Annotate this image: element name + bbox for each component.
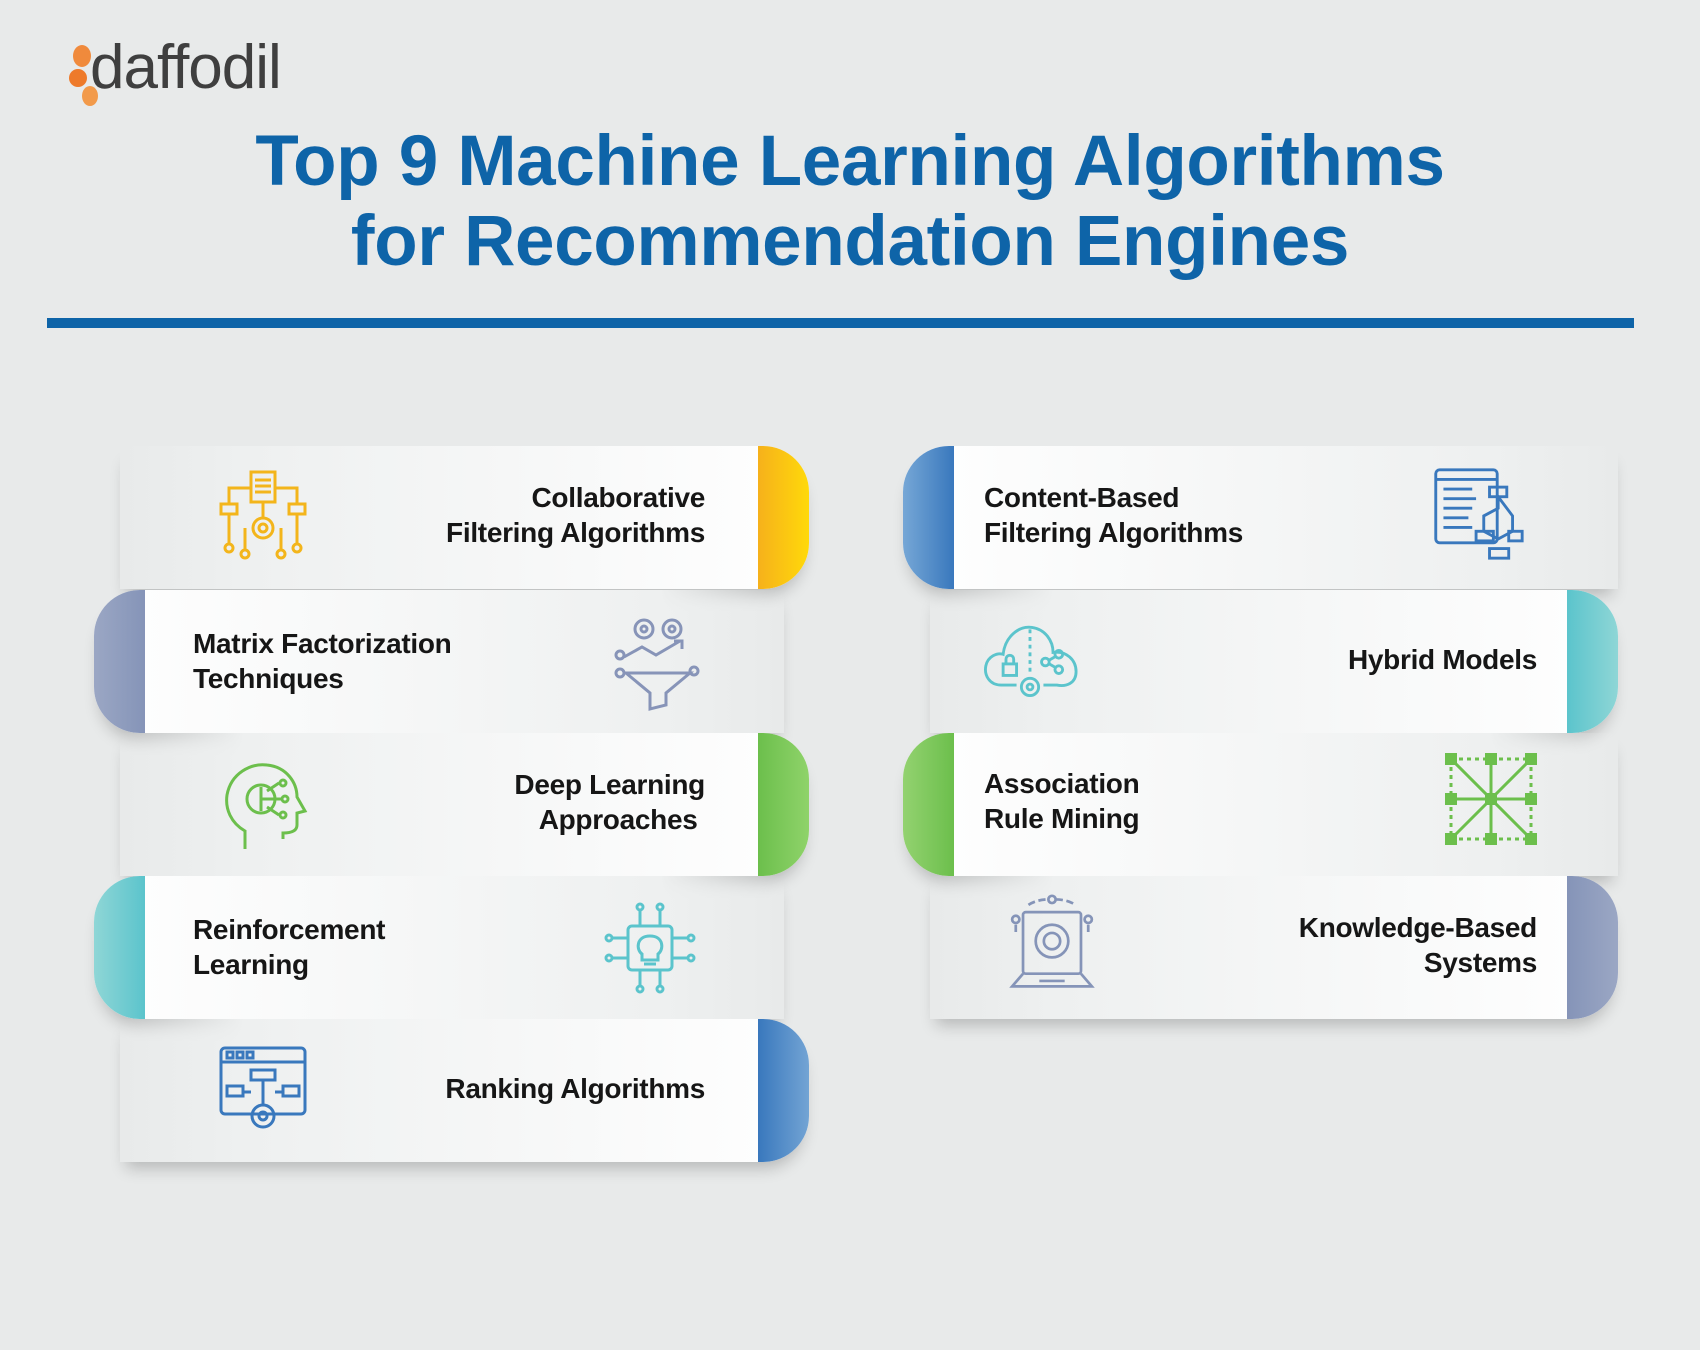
text: Knowledge-Based [1299,912,1537,943]
text: Techniques [193,663,344,694]
text [193,628,451,694]
card: Matrix Factorization [94,590,784,733]
icon: network grid [1445,753,1537,845]
card: Hybrid Models [930,590,1618,733]
card: Association Rule Mining [903,733,1618,876]
icon: flow gear [220,470,306,560]
logo: daffodil [90,33,281,102]
icon: laptop gear [1009,894,1095,988]
card: Reinforcement Learning [94,876,784,1019]
card: Knowledge-Based Systems [930,876,1618,1019]
text: Content-Based [984,482,1179,513]
title: Top 9 Machine Learning Algorithms [255,122,1445,201]
text: Systems [1424,947,1537,978]
text: Association [984,768,1139,799]
text: Rule Mining [984,803,1139,834]
text: Matrix Factorization [193,628,451,659]
text [514,769,705,835]
text [1299,912,1537,978]
card: Ranking Algorithms [120,1019,809,1162]
icon: head brain [225,763,308,849]
card: Deep Learning [120,733,809,876]
text: Reinforcement [193,914,385,945]
icon: browser gear [220,1046,306,1128]
title: for Recommendation Engines [351,202,1349,281]
text: Approaches [539,804,698,835]
text [446,482,705,548]
text: Hybrid Models [1348,644,1537,675]
text: Deep Learning [514,769,705,800]
icon: funnel gears [614,618,700,711]
title [255,122,1445,281]
card: Collaborative Filtering [120,446,809,589]
card: Content-Based Filtering [903,446,1618,589]
text: Filtering Algorithms [984,517,1243,548]
icon: document flow [1434,468,1524,560]
icon: chip bulb [604,902,696,994]
text [193,914,386,980]
text: Ranking Algorithms [445,1073,705,1104]
text: Collaborative [532,482,705,513]
text: Learning [193,949,309,980]
text [984,482,1243,548]
icon: cloud [984,626,1078,697]
text [984,768,1139,834]
text: Filtering Algorithms [446,517,705,548]
